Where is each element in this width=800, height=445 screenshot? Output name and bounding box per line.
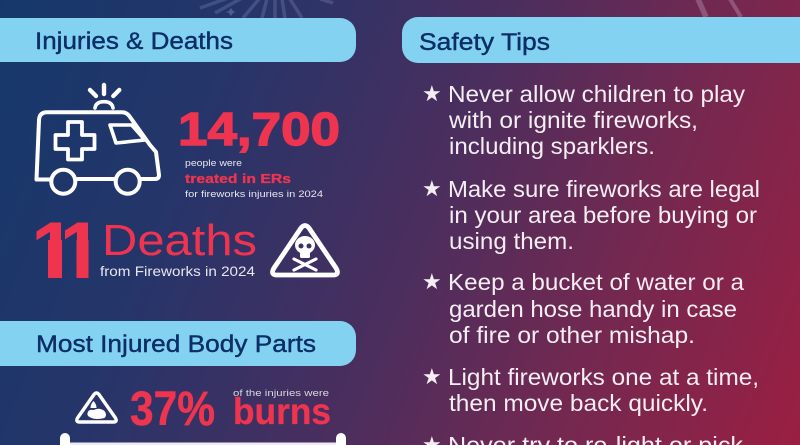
- tip 2: in your area before buying or: [449, 202, 757, 228]
- stat: 11 deaths: 1: [31, 206, 76, 296]
- tip 2: using them.: [449, 228, 574, 254]
- tip 4: ★: [422, 364, 442, 389]
- icon: ambulance: [36, 85, 159, 194]
- tip 1: ★: [422, 81, 442, 106]
- tip 4: then move back quickly.: [449, 390, 708, 416]
- tip 1: Never allow children to play: [448, 81, 746, 107]
- tip 3: ★: [422, 269, 442, 294]
- header: Most Injured Body Parts: [0, 321, 356, 366]
- text: ER description: for fireworks injuries in 2024: [185, 189, 323, 199]
- body diagram frame: [60, 433, 346, 445]
- stat: 11 deaths: 1: [58, 206, 103, 296]
- stat: 14,700: 14,700: [178, 103, 340, 155]
- tip 2: Make sure fireworks are legal: [448, 176, 760, 202]
- stat: 37%: 37%: [130, 383, 215, 436]
- text: burns: burns: [233, 391, 331, 432]
- tip 3: garden hose handy in case: [449, 296, 737, 322]
- tip 3: [422, 269, 744, 348]
- text: ER description: people were: [185, 158, 242, 168]
- stat: 11 deaths: [36, 222, 256, 278]
- fireworks decoration: [200, 0, 741, 18]
- header: Safety Tips: [402, 17, 800, 63]
- tip 4: Light fireworks one at a time,: [448, 364, 759, 390]
- text: burns: of the injuries were: [233, 388, 329, 398]
- tip 1: [422, 81, 746, 159]
- stat: 11 deaths: from Fireworks in 2024: [100, 263, 255, 279]
- tip 3: of fire or other mishap.: [449, 322, 695, 348]
- header: Most Injured Body Parts: Most Injured Body Parts: [36, 331, 316, 358]
- tip 4: [422, 364, 759, 416]
- tip 1: including sparklers.: [449, 133, 655, 159]
- header: Injuries & Deaths: Injuries & Deaths: [35, 28, 233, 55]
- tip 3: Keep a bucket of water or a: [448, 269, 744, 295]
- text: ER description: treated in ERs: [185, 171, 291, 186]
- header: Injuries & Deaths: [0, 18, 356, 62]
- tip 1: with or ignite fireworks,: [448, 107, 698, 133]
- tip 2: ★: [422, 176, 442, 201]
- tip 2: [422, 176, 760, 254]
- text: ER description: [185, 158, 323, 199]
- icon: skull warning: [273, 226, 337, 275]
- stat: 11 deaths: Deaths: [102, 216, 257, 265]
- header: Safety Tips: Safety Tips: [419, 29, 550, 56]
- icon: burn warning: [77, 393, 116, 422]
